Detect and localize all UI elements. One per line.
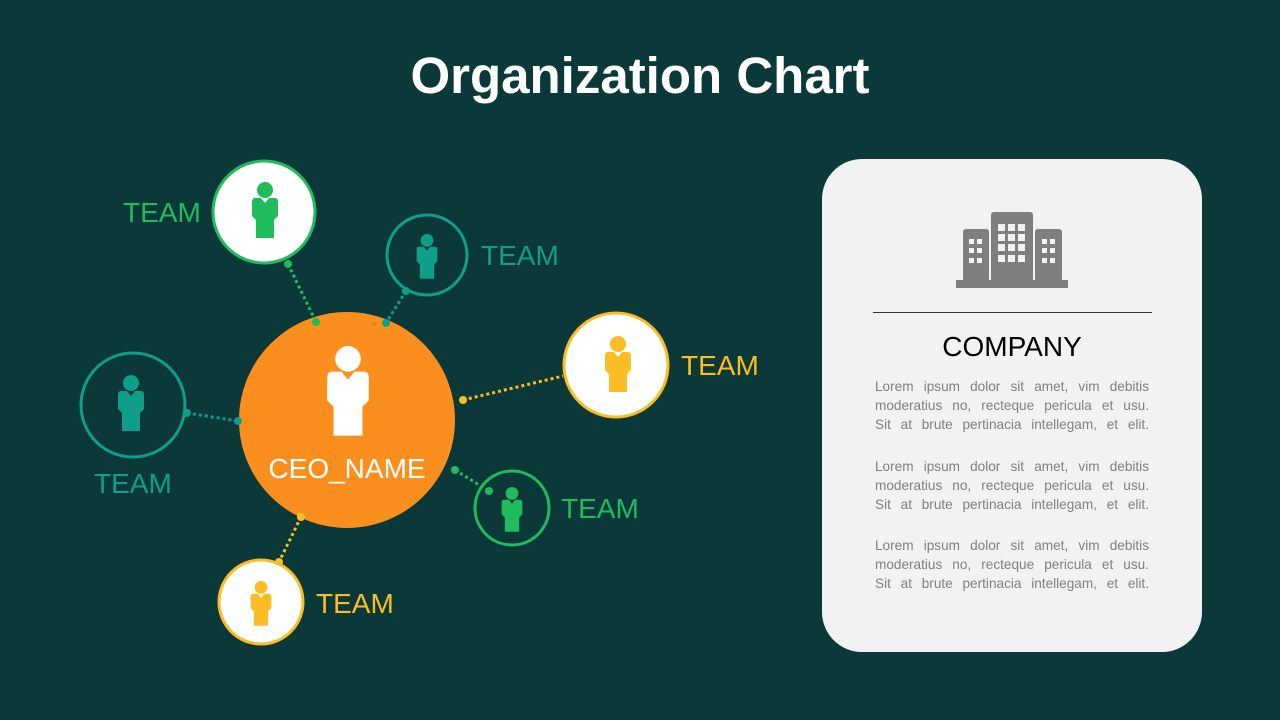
team node green lower: TEAM	[561, 493, 639, 524]
CEO circle	[239, 312, 455, 528]
text block 2: moderatius no, recteque pericula et usu.	[875, 478, 1149, 493]
team node green top: TEAM	[123, 197, 201, 228]
text block 3	[875, 538, 1149, 591]
text block 2	[875, 459, 1149, 512]
team node yellow right	[564, 313, 759, 417]
team node green lower	[475, 471, 639, 545]
team node teal top: TEAM	[481, 240, 559, 271]
team node yellow bottom	[219, 560, 394, 644]
team node yellow right: TEAM	[681, 350, 759, 381]
icon: building	[956, 212, 1068, 288]
text block 1: Lorem ipsum dolor sit amet, vim debitis	[875, 379, 1149, 394]
team node teal left	[81, 353, 185, 499]
text block 3: Lorem ipsum dolor sit amet, vim debitis	[875, 538, 1149, 553]
CEO circle: CEO_NAME	[268, 453, 426, 484]
panel: company	[822, 159, 1202, 652]
team node teal top	[387, 215, 559, 295]
connector dots	[183, 260, 493, 566]
text block 3: moderatius no, recteque pericula et usu.	[875, 557, 1149, 572]
text block 1	[875, 379, 1149, 432]
text block 1: moderatius no, recteque pericula et usu.	[875, 398, 1149, 413]
text block 2: Lorem ipsum dolor sit amet, vim debitis	[875, 459, 1149, 474]
team node teal left: TEAM	[94, 468, 172, 499]
connectors	[187, 264, 563, 562]
heading: company: COMPANY	[942, 331, 1082, 362]
title: Organization Chart	[410, 47, 870, 104]
text block 3: Sit at brute pertinacia intellegam, et elit.	[875, 576, 1149, 591]
text block 2: Sit at brute pertinacia intellegam, et elit.	[875, 497, 1149, 512]
team node green top	[123, 161, 315, 263]
text block 1: Sit at brute pertinacia intellegam, et elit.	[875, 417, 1149, 432]
team node yellow bottom: TEAM	[316, 588, 394, 619]
